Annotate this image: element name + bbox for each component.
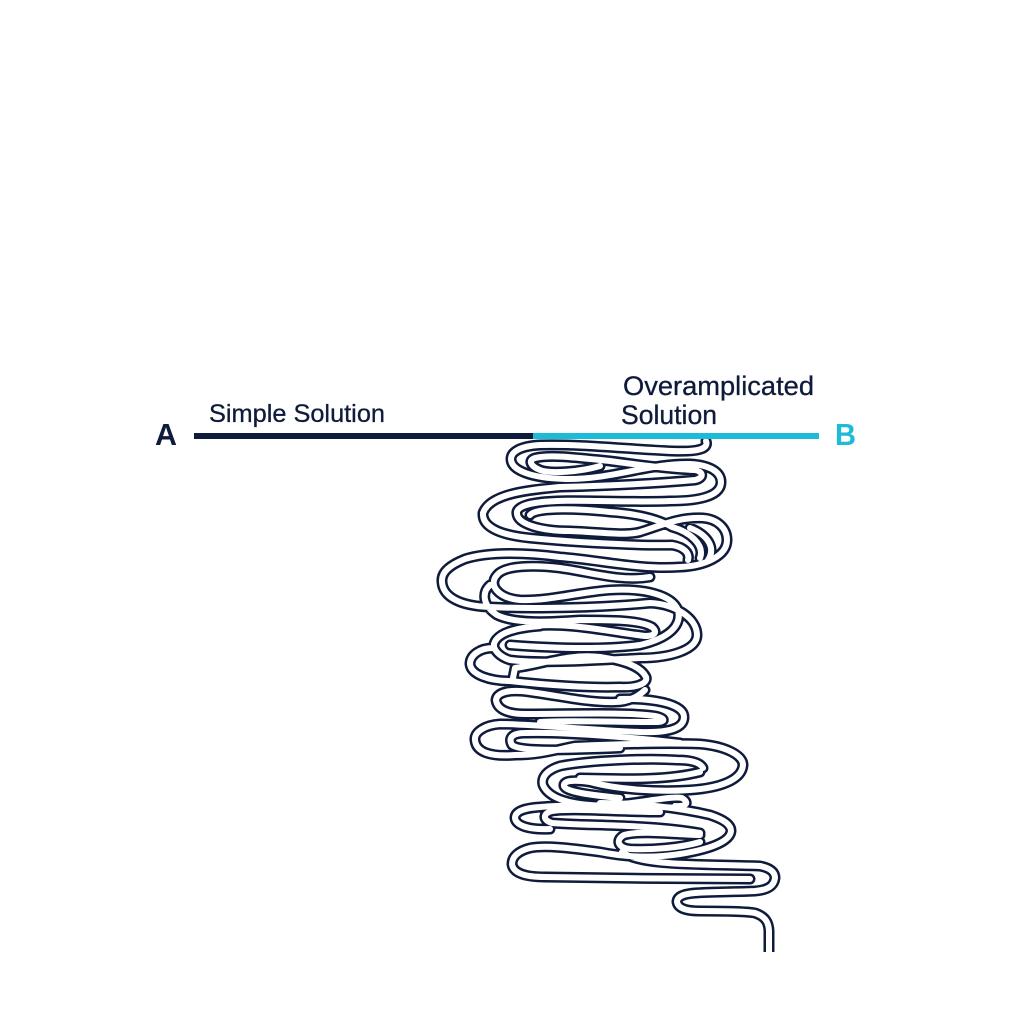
coiled overcomplicated path [442,441,775,952]
straight simple route segment [194,433,533,439]
overcomplicated route segment [533,433,819,439]
label: overamplicated solution: Overamplicated [623,371,814,401]
label: point A: A [155,417,177,452]
label: point B: B [835,417,856,452]
label: overamplicated solution: Solution [621,400,717,430]
label: simple solution: Simple Solution [209,400,385,428]
